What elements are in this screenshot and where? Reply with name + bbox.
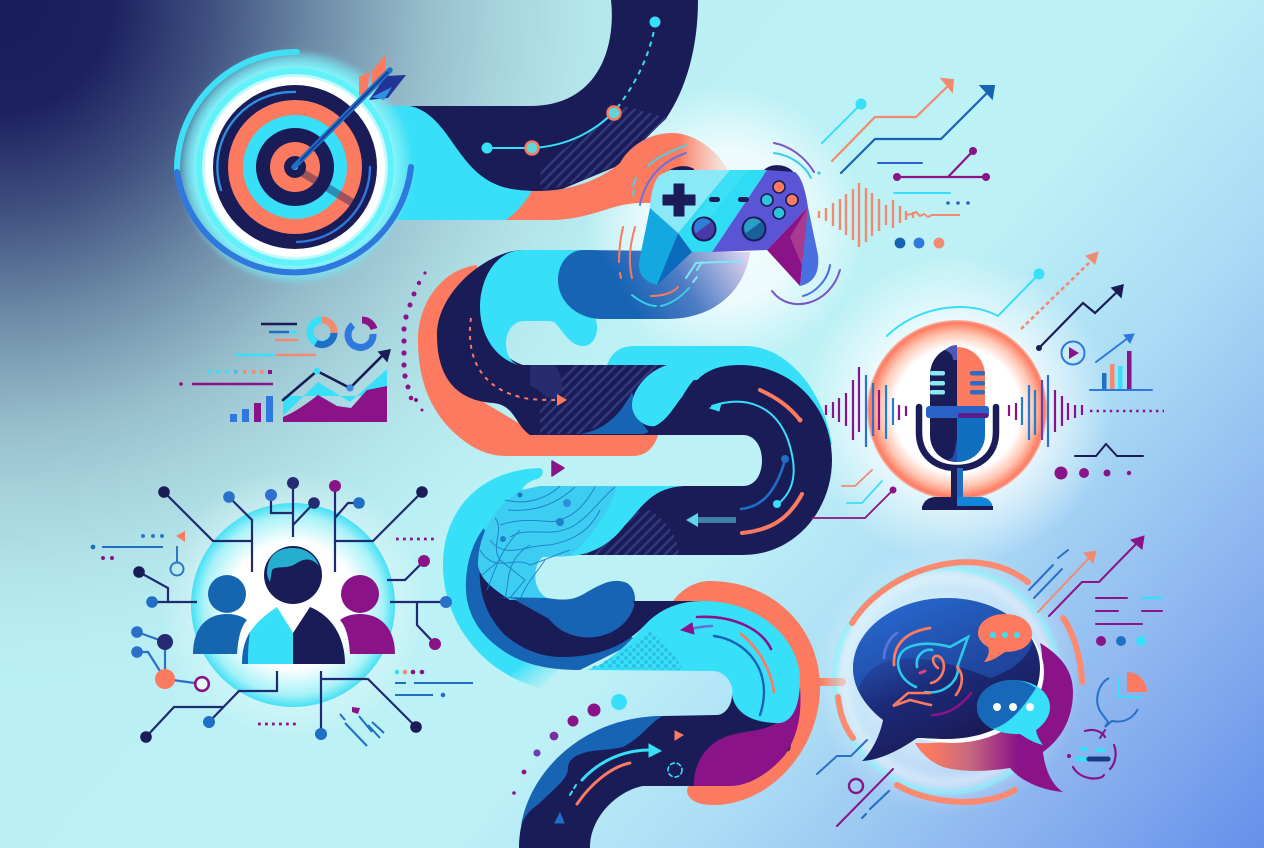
icon: microphone xyxy=(867,320,1047,510)
ribbon: navy bottom S xyxy=(519,690,800,848)
chat side trend lines xyxy=(817,536,1162,826)
donut charts xyxy=(310,320,374,347)
light trace xyxy=(686,261,742,282)
ribbon: blue wave on bottom S xyxy=(521,716,663,826)
ribbon: navy right bend xyxy=(530,365,832,555)
people network nodes xyxy=(133,477,452,743)
route marks xyxy=(681,617,774,715)
icon: people in circle xyxy=(191,503,395,707)
arrow on navy xyxy=(686,513,736,527)
mic yoke xyxy=(919,407,996,468)
dashed coral route xyxy=(470,318,567,406)
action buttons xyxy=(773,181,785,193)
people network lines xyxy=(139,483,446,737)
ribbon: lower cyan section with map xyxy=(443,468,703,688)
icon: target xyxy=(177,49,413,285)
icon: chat bubbles rings xyxy=(835,562,1082,802)
route line with nodes xyxy=(482,16,660,154)
bumpers xyxy=(663,166,694,177)
center person body xyxy=(242,607,293,664)
icon: cyan bubble xyxy=(977,680,1050,745)
icon: purple back bubble xyxy=(915,643,1073,792)
icon: small coral bubble xyxy=(978,614,1032,662)
left mini dashboard xyxy=(179,320,390,422)
hatched texture xyxy=(540,365,665,434)
hatched texture xyxy=(540,103,667,190)
connector stub xyxy=(820,678,842,686)
controller audio waveform xyxy=(819,183,960,247)
blue band xyxy=(466,528,640,670)
ribbon: second section coral edge xyxy=(418,265,658,456)
navy strip linking blob to right xyxy=(628,601,705,632)
icon: dark main bubble xyxy=(853,598,1044,761)
pie chart icon xyxy=(1097,672,1147,727)
three status dots xyxy=(895,238,944,248)
swirl inside bubble xyxy=(884,628,971,715)
ribbon: cyan swoosh from target xyxy=(380,106,532,220)
dotted trail: left purple arc xyxy=(401,271,427,412)
map texture panel xyxy=(478,486,617,600)
shadow xyxy=(303,173,353,203)
ribbon: blue band under controller xyxy=(558,250,750,319)
area chart xyxy=(283,369,387,416)
sticks xyxy=(692,218,716,240)
contour lines xyxy=(480,486,615,600)
chat side dots xyxy=(1096,636,1146,646)
d-pad xyxy=(663,184,695,216)
ribbon: right bend route marks xyxy=(710,390,802,533)
mic side charts xyxy=(812,252,1152,518)
play triangle xyxy=(552,461,564,476)
halftone dots xyxy=(590,630,683,670)
top right trend arrows xyxy=(822,79,994,205)
hatched texture xyxy=(578,510,679,555)
dotted trail: lower bubbles xyxy=(512,694,627,795)
navy band xyxy=(480,565,703,657)
network node cluster xyxy=(131,626,209,691)
icon: game controller xyxy=(639,165,818,286)
outer arcs xyxy=(177,52,297,170)
cyan wave on navy xyxy=(632,365,720,426)
blue blob xyxy=(497,581,635,637)
legend lines xyxy=(192,324,316,384)
ribbon: coral swoosh to controller xyxy=(506,133,735,220)
ribbon: navy middle S xyxy=(437,250,700,435)
people side marks xyxy=(91,531,473,746)
trend arrow xyxy=(283,355,383,400)
controller motion arcs xyxy=(619,143,840,306)
minus buttons xyxy=(709,197,720,202)
mic sound waves xyxy=(826,367,1164,447)
arrow shaft xyxy=(294,70,390,167)
arrow fletching xyxy=(359,72,369,96)
ribbon: cyan upper bend xyxy=(480,250,597,365)
center person head xyxy=(264,546,322,604)
ribbon: top navy section xyxy=(385,0,698,215)
ribbon: cyan back layer of right bend xyxy=(607,346,832,445)
ribbon: cyan lower right bend xyxy=(587,601,800,723)
inner arcs xyxy=(217,92,295,190)
coral ring lower bend xyxy=(673,581,820,805)
small face icon xyxy=(1067,730,1116,779)
ribbon: purple blob xyxy=(694,687,800,786)
bars xyxy=(230,414,237,422)
ribbon: bottom route marks xyxy=(555,731,683,823)
soft glow halos behind icons xyxy=(158,85,1112,815)
